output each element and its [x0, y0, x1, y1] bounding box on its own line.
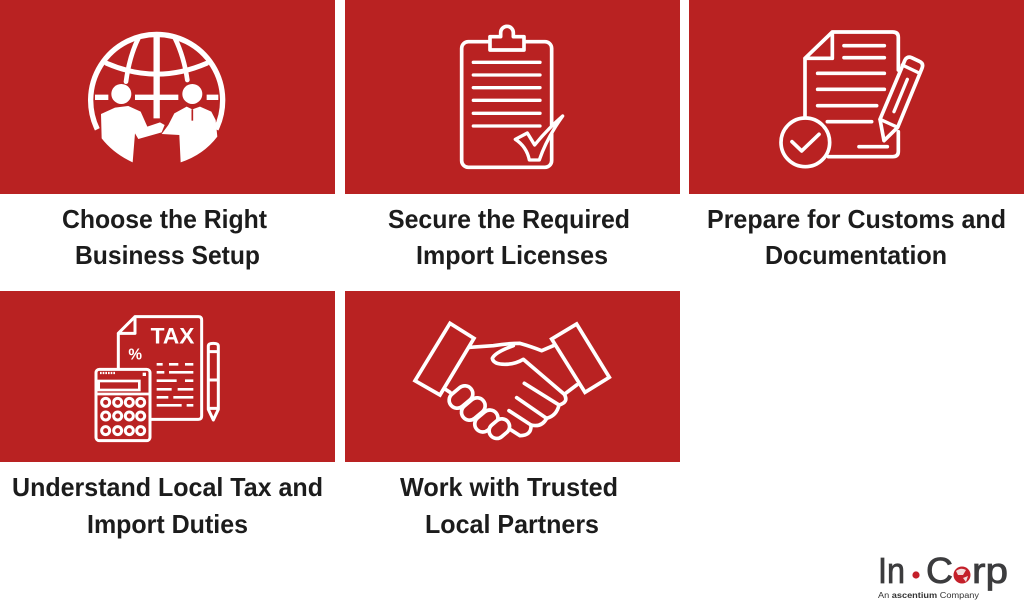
caption: Understand Local Tax and: [12, 472, 323, 502]
caption: [12, 472, 323, 539]
panel background: [345, 291, 680, 462]
logo: InCorp, an Ascentium company: [878, 550, 1008, 600]
caption: [62, 204, 267, 270]
panel: choose the right business setup: [0, 0, 335, 270]
panel background: [0, 0, 335, 194]
caption: Business Setup: [75, 240, 260, 270]
caption: [388, 204, 630, 270]
icon: clipboard with checkmark: [462, 26, 563, 167]
panel background: [0, 291, 335, 462]
icon: tax form, calculator and pen: [96, 317, 218, 441]
caption: Import Licenses: [416, 240, 608, 270]
logo: InCorp, an Ascentium company: C: [926, 550, 953, 591]
caption: Local Partners: [425, 509, 599, 539]
icon: document with pencil and check badge: [781, 32, 923, 167]
panel background: [689, 0, 1024, 194]
icon: tax form, calculator and pen: TAX: [151, 323, 195, 348]
logo: InCorp, an Ascentium company: rp: [972, 550, 1008, 591]
caption: [707, 204, 1006, 270]
icon: tax form, calculator and pen: %: [128, 346, 142, 363]
panel: prepare for customs and documentation: [689, 0, 1024, 270]
panel: work with trusted local partners: [345, 291, 680, 539]
caption: Documentation: [765, 240, 947, 270]
panel: understand local tax and import duties: [0, 291, 335, 539]
icon: globe with two business people shaking hands: [91, 33, 223, 162]
icon: handshake: [415, 323, 609, 442]
caption: Choose the Right: [62, 204, 267, 234]
logo: InCorp, an Ascentium company: An ascentium Company: [878, 591, 979, 600]
caption: Work with Trusted: [400, 472, 618, 502]
caption: [400, 472, 618, 539]
caption: Prepare for Customs and: [707, 204, 1006, 234]
panel background: [345, 0, 680, 194]
panel: secure the required import licenses: [345, 0, 680, 270]
caption: Import Duties: [87, 509, 248, 539]
caption: Secure the Required: [388, 204, 630, 234]
logo: InCorp, an Ascentium company: In: [878, 550, 905, 591]
